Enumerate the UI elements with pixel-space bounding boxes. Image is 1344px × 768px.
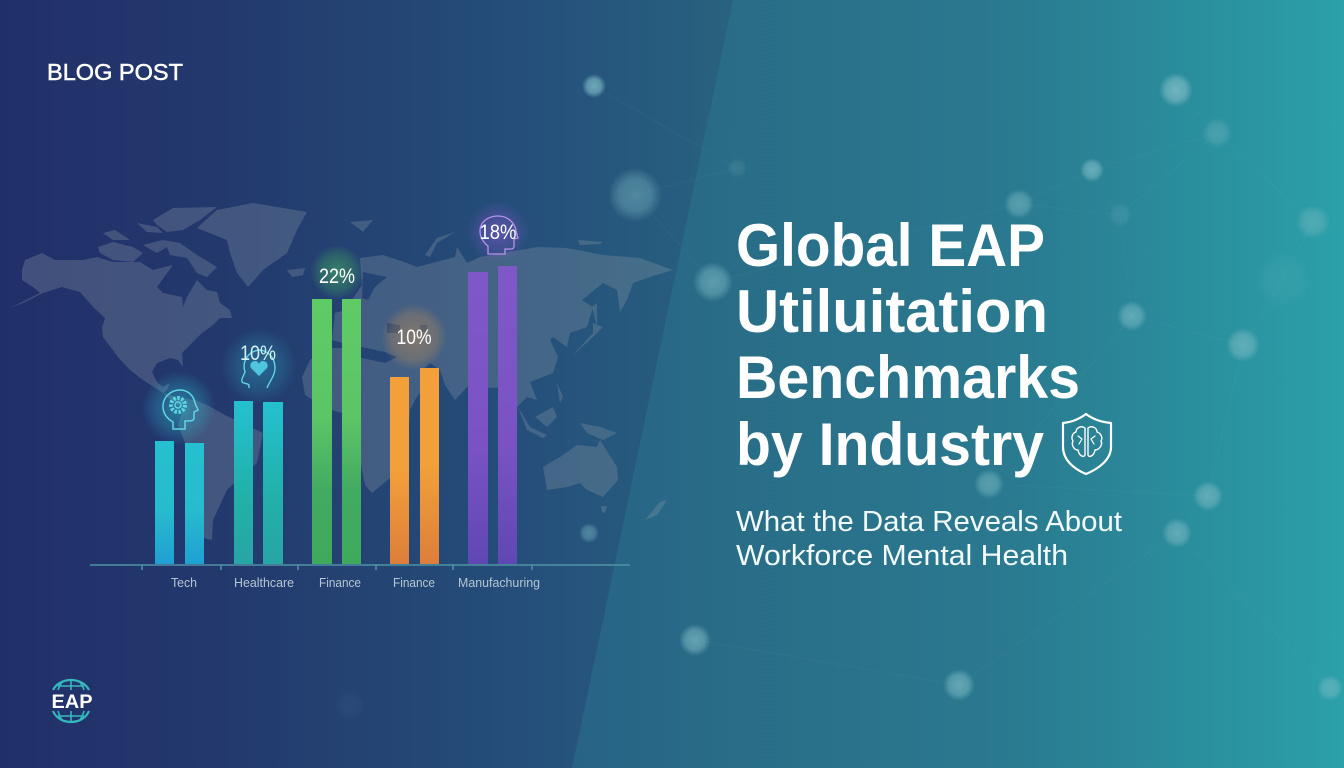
value glow: 22% finance — [310, 245, 364, 299]
value label: 22% finance: 22% — [319, 265, 355, 288]
icon: healthcare head with heart — [221, 328, 297, 404]
bars: Finance orange — [390, 368, 439, 564]
bar chart: EAP utilization by industry — [90, 201, 630, 590]
bars: Tech — [155, 441, 204, 564]
axis labels: Healthcare — [234, 576, 294, 590]
value glow: 10% finance — [381, 304, 447, 370]
icon: manufacturing head with value — [467, 201, 529, 263]
value label: 10% finance: 10% — [396, 326, 432, 349]
title: Benchmarks — [736, 344, 1080, 411]
subtitle: What the Data Reveals About — [736, 506, 1122, 538]
blog post label: BLOG POST — [47, 59, 183, 85]
axis labels: Tech — [171, 576, 197, 590]
axis labels — [171, 576, 540, 590]
icon: tech head with gear — [142, 371, 216, 445]
axis labels: Manufachuring — [458, 576, 540, 590]
Greenland — [197, 203, 307, 287]
Australia and New Zealand — [543, 440, 667, 520]
title: by Industry — [736, 411, 1045, 478]
icon: shield with brain — [1063, 414, 1111, 474]
value label: 18% manufacturing: 18% — [480, 221, 516, 244]
axis labels: Finance — [393, 576, 435, 590]
logo: EAP globe: EAP — [52, 692, 93, 713]
subtitle — [736, 506, 1122, 572]
axis labels: Finance — [319, 576, 361, 590]
bars: Manufacturing — [468, 266, 517, 564]
title: Global EAP — [736, 212, 1045, 279]
value label: 10% healthcare: 10% — [240, 342, 276, 365]
Africa — [302, 348, 410, 493]
Eurasia — [332, 247, 673, 410]
bars: Healthcare — [234, 401, 283, 564]
diagonal light panel — [572, 0, 1344, 768]
world map — [10, 203, 673, 540]
background network of glowing nodes — [335, 73, 1343, 720]
Iceland — [287, 268, 305, 277]
title: Utiluitation — [736, 278, 1048, 345]
title — [736, 212, 1080, 478]
South America — [163, 393, 263, 540]
North America — [10, 253, 232, 393]
chart axis — [90, 565, 630, 570]
bars: Finance green — [312, 299, 361, 564]
Asian islands — [350, 220, 633, 440]
Arctic islands — [98, 207, 217, 277]
logo: EAP globe — [52, 680, 93, 722]
subtitle: Workforce Mental Health — [736, 540, 1068, 572]
